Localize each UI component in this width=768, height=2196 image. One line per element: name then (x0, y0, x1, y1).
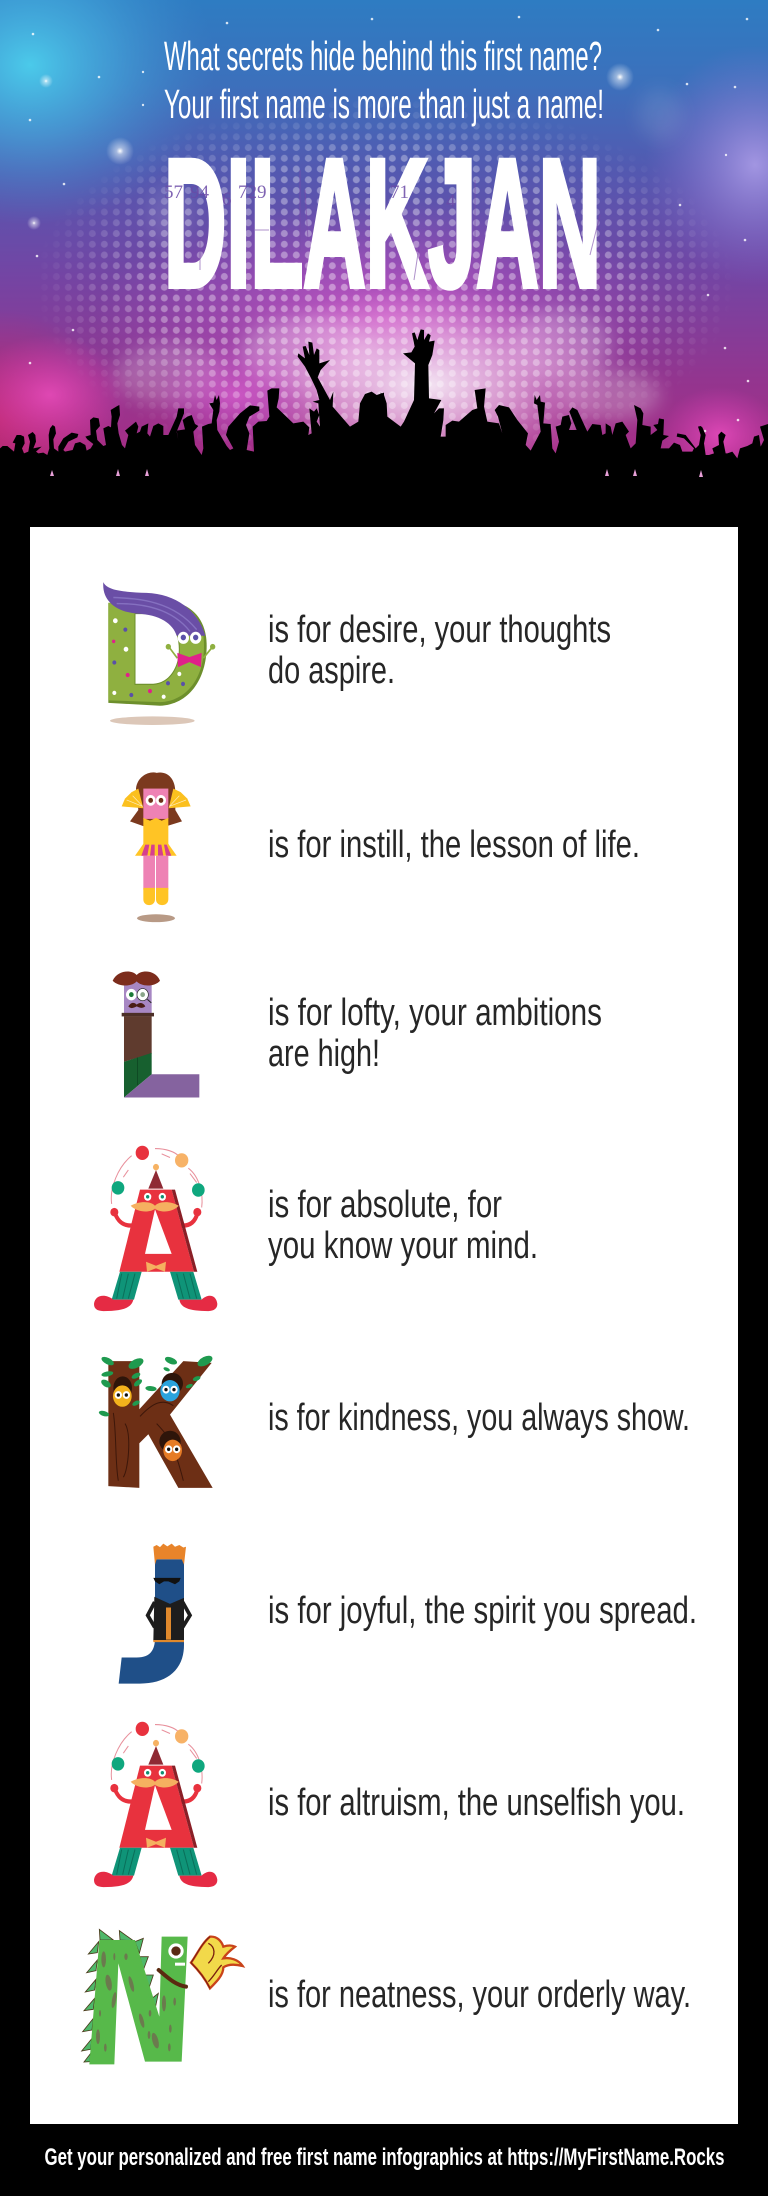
name title: 57 (164, 182, 183, 203)
row: A second (94, 1722, 685, 1887)
icon: letter J biker (119, 1544, 190, 1684)
icon: letter A juggler second (94, 1722, 217, 1887)
header background (0, 0, 768, 458)
row: K (98, 1354, 690, 1488)
icon: letter N dragon (82, 1929, 243, 2064)
text: A line (268, 1184, 538, 1267)
text: L line: is for lofty, your ambitions (268, 992, 602, 1034)
icon: letter D character (103, 582, 215, 725)
text: A line: is for absolute, for (268, 1184, 502, 1226)
row: A (94, 1146, 538, 1311)
panel: letters (30, 527, 738, 2124)
icon: letter K tree with owls (98, 1354, 214, 1488)
text: L line (268, 992, 602, 1075)
text: I line: is for instill, the lesson of life. (268, 824, 640, 866)
name title: 6 (222, 189, 232, 210)
name title: 94 (190, 182, 210, 203)
icon: letter I cheerleader (122, 772, 191, 922)
text: L line: are high! (268, 1033, 380, 1075)
row: L (113, 971, 602, 1097)
text: A line: you know your mind. (268, 1225, 538, 1267)
row: J (119, 1544, 697, 1684)
row: D (103, 582, 611, 725)
text: D line: do aspire. (268, 650, 395, 692)
row: N (82, 1929, 691, 2064)
crowd silhouette (0, 329, 768, 533)
name title: 729 (238, 182, 266, 203)
text: D line (268, 609, 611, 692)
name title: 4 (446, 191, 456, 212)
icon: letter L gentleman (113, 971, 199, 1097)
tagline (164, 33, 604, 127)
icon: letter A juggler (94, 1146, 217, 1311)
name title: 71 (390, 182, 409, 203)
row: I (122, 772, 640, 922)
text: D line: is for desire, your thoughts (268, 609, 611, 651)
